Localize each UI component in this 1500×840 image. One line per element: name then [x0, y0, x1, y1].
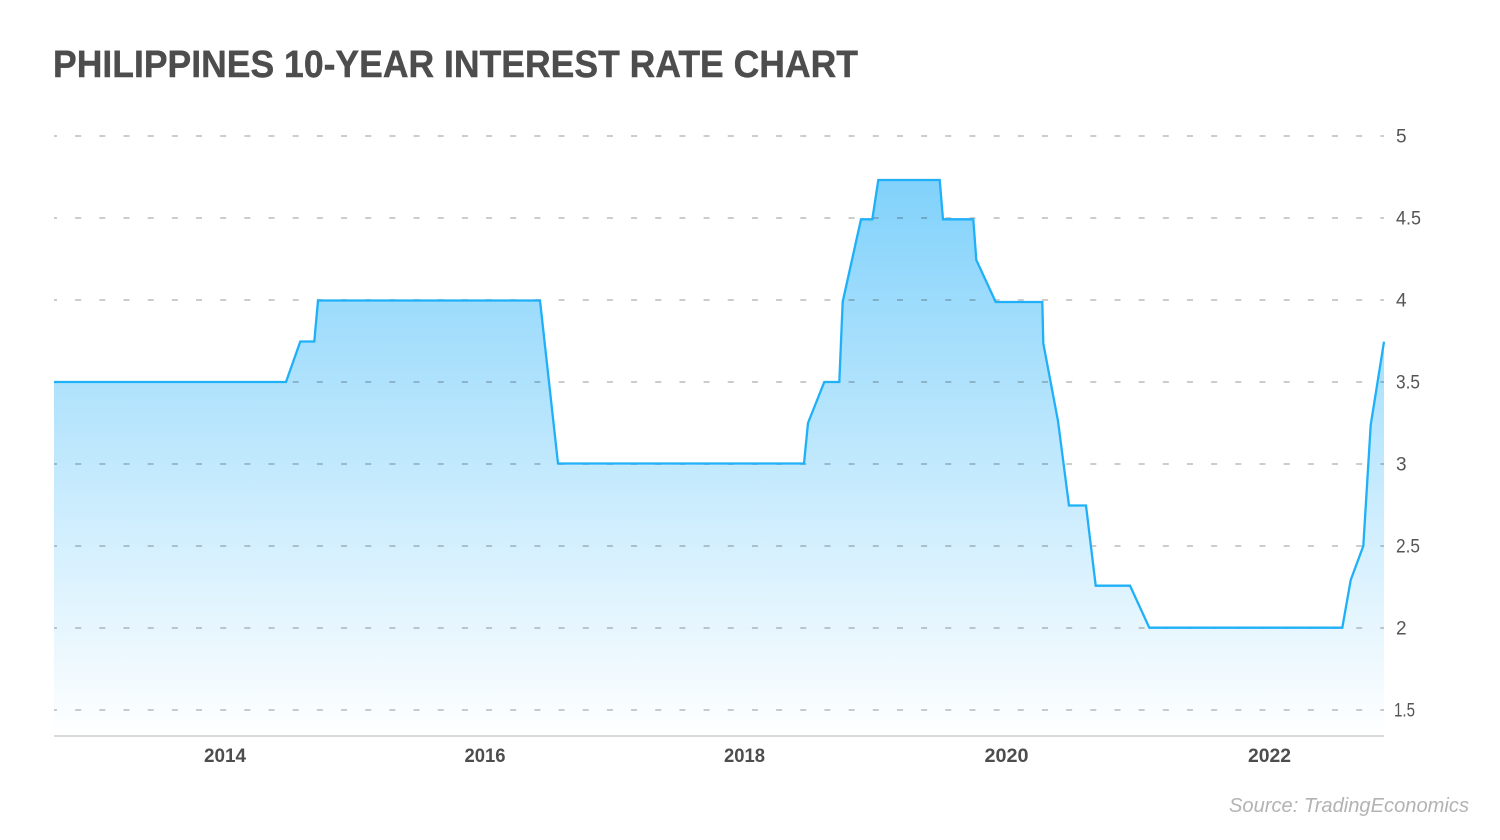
source note: Source: TradingEconomics [1229, 795, 1469, 817]
x axis line [54, 735, 1384, 737]
area fill [54, 180, 1384, 735]
x axis labels: 2018 [724, 745, 765, 767]
x axis labels: 2022 [1248, 745, 1291, 767]
y axis labels [1394, 126, 1421, 722]
rate line [54, 180, 1384, 628]
y axis labels: 4 [1396, 290, 1407, 312]
y axis labels: 2.5 [1396, 536, 1420, 558]
y axis labels: 1.5 [1394, 700, 1415, 722]
x axis labels: 2016 [464, 745, 506, 767]
y axis labels: 2 [1396, 618, 1407, 640]
x axis labels: 2014 [204, 745, 246, 767]
title: PHILIPPINES 10-YEAR INTEREST RATE CHART [53, 44, 858, 86]
gridlines [54, 136, 1384, 710]
y axis labels: 3 [1396, 454, 1407, 476]
x axis labels [204, 745, 1291, 767]
chart: interest rate [54, 126, 1421, 767]
y axis labels: 3.5 [1396, 372, 1420, 394]
x axis labels: 2020 [984, 745, 1029, 767]
y axis labels: 4.5 [1396, 208, 1421, 230]
y axis labels: 5 [1396, 126, 1407, 148]
